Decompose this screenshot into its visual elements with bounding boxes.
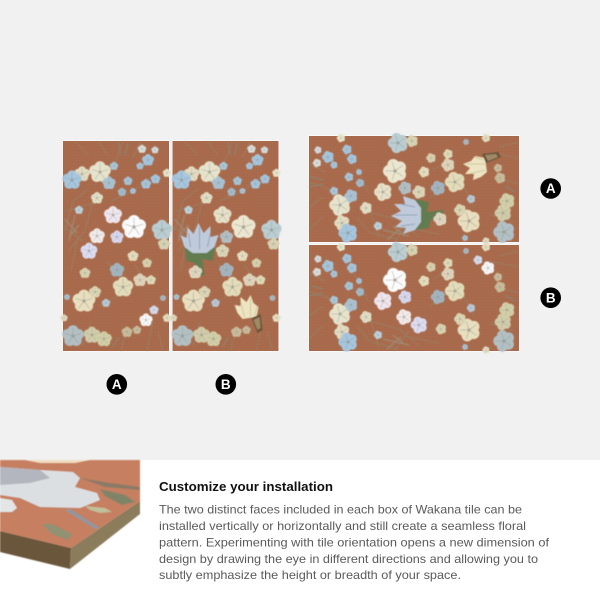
horizontal tile layout: [308, 133, 520, 354]
cream petal at top edge: [25, 460, 90, 463]
grey background panel: [0, 0, 600, 460]
left side of tile: [0, 531, 71, 569]
white lower panel: [0, 460, 600, 600]
badge A under vertical tile: A: [112, 377, 122, 392]
body text: design by drawing the eye in different directions and allowing you to: [159, 552, 538, 566]
tile face B, horizontal: [308, 242, 520, 354]
tile edge photo: [0, 460, 140, 569]
badge A beside horizontal tile: [540, 178, 561, 199]
badge A beside horizontal tile: A: [546, 181, 556, 196]
tile face B, vertical: [170, 140, 282, 352]
vertical tile layout: [60, 140, 282, 352]
badge B under vertical tile: [216, 374, 236, 395]
tile face A, horizontal: [308, 133, 520, 245]
top surface of tile: [0, 460, 140, 548]
tile face A, vertical: [60, 140, 172, 352]
badge B under vertical tile: B: [221, 377, 231, 392]
right side of tile: [70, 501, 140, 569]
heading: Customize your installation: [159, 479, 333, 494]
body text: The two distinct faces included in each box of Wakana tile can be: [159, 502, 522, 516]
body text: installed vertically or horizontally and still create a seamless floral: [159, 519, 526, 533]
badge A under vertical tile: [106, 374, 127, 395]
body text: [159, 502, 550, 582]
body text: subtly emphasize the height or breadth of your space.: [159, 568, 461, 582]
badge B beside horizontal tile: B: [546, 290, 556, 305]
badge B beside horizontal tile: [540, 287, 561, 308]
body text: pattern. Experimenting with tile orientation opens a new dimension of: [159, 536, 550, 550]
white flower petals: [0, 467, 100, 508]
green leaves: [100, 489, 135, 505]
